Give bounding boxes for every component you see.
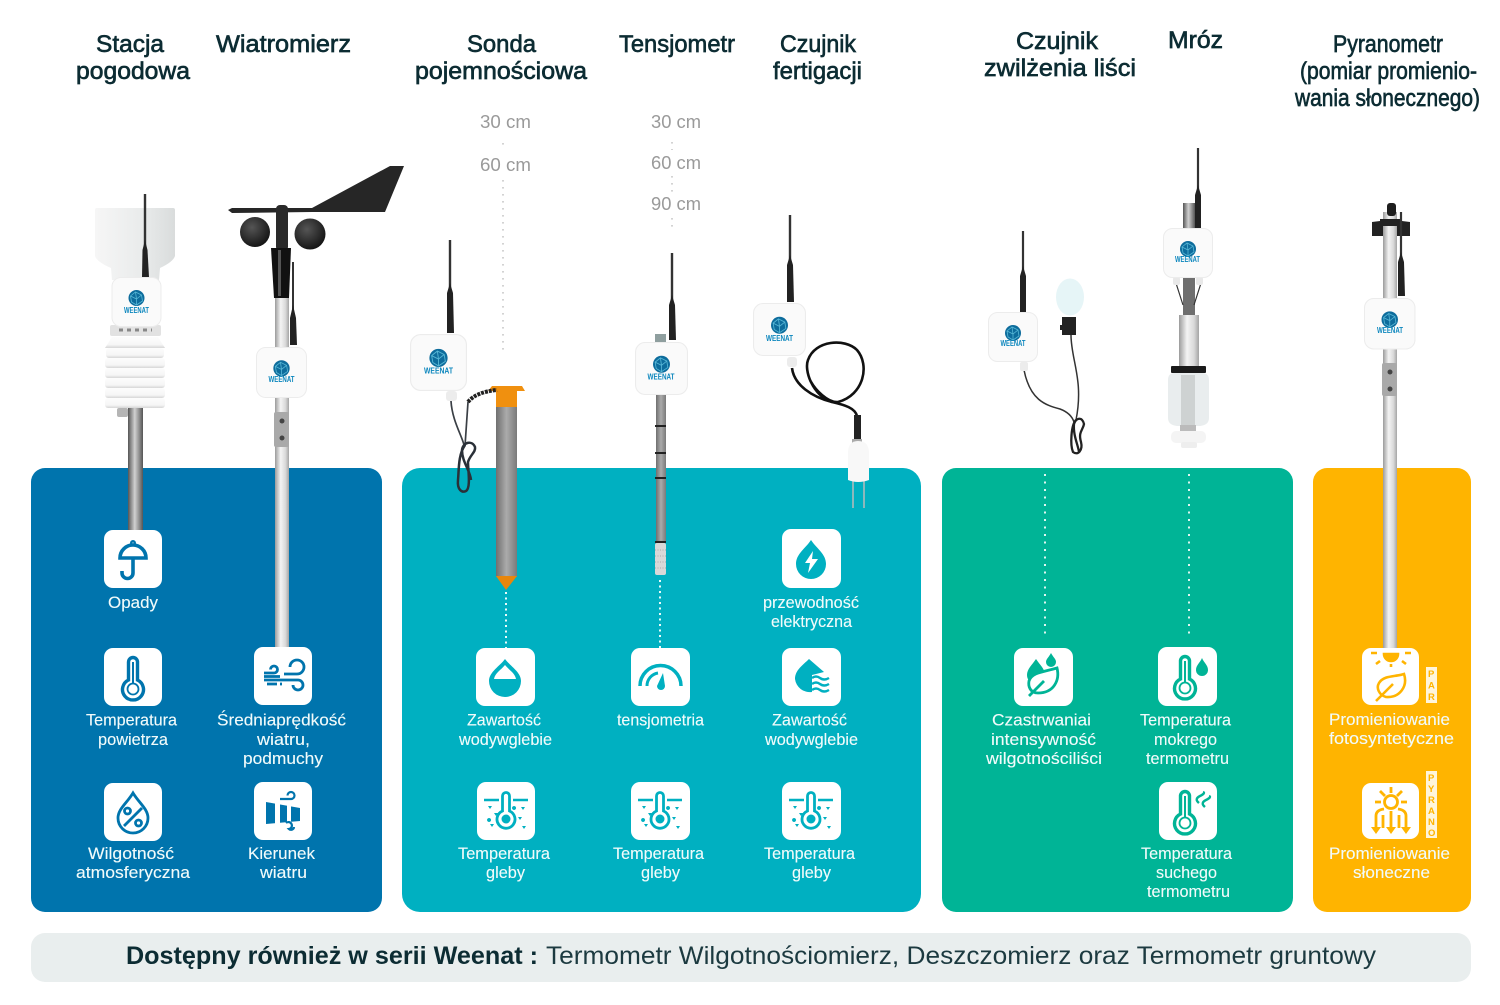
footer banner: Termometr Wilgotnościomierz, Deszczomierz oraz Termometr gruntowy bbox=[546, 942, 1377, 970]
tag: PYRANO bbox=[1426, 771, 1437, 839]
device: pyranometr bbox=[1365, 203, 1415, 649]
tag: PYRANO: R bbox=[1428, 795, 1435, 806]
icon: thermometer bbox=[122, 658, 144, 700]
metric: Temperatura mokrego termometru bbox=[1140, 647, 1232, 768]
title: Sonda pojemnościowa: pojemnościowa bbox=[415, 58, 588, 85]
device: tensjometr: WEENAT bbox=[648, 372, 675, 382]
metric: Wilgotność atmosferyczna: atmosferyczna bbox=[76, 863, 191, 882]
icon: half drop bbox=[489, 659, 521, 697]
metric: Temperatura gleby (sonda) bbox=[458, 782, 551, 882]
icon: gauge bbox=[640, 666, 681, 690]
metric: Temperatura suchego termometru bbox=[1141, 782, 1233, 901]
metric: Zawartość wody w glebie (sonda): Zawartość bbox=[467, 710, 541, 730]
metric: Promieniowanie fotosyntetyczne bbox=[1329, 648, 1454, 748]
dotted link: mróz bbox=[1188, 474, 1190, 638]
metric: Opady bbox=[104, 530, 162, 612]
panel: gleba bbox=[402, 468, 921, 912]
metric: Temperatura powietrza: powietrza bbox=[98, 730, 169, 749]
title: Czujnik fertigacji: Czujnik bbox=[780, 31, 857, 58]
metric: Zawartość wody w glebie (fertigacja): wodywglebie bbox=[764, 730, 858, 749]
metric: Zawartość wody w glebie (sonda) bbox=[458, 648, 552, 749]
footer banner bbox=[31, 933, 1471, 982]
metric: Promieniowanie słoneczne: Promieniowanie bbox=[1329, 844, 1450, 863]
device: mróz bbox=[1164, 148, 1212, 448]
metric: Zawartość wody w glebie (sonda): wodywglebie bbox=[458, 730, 552, 749]
metric: Kierunek wiatru: wiatru bbox=[259, 863, 307, 882]
metric: Czas trwania i intensywność wilgotności liści: Czastrwaniai bbox=[992, 710, 1091, 730]
device: stacja pogodowa: WEENAT bbox=[124, 305, 150, 315]
title: Pyranometr: Pyranometr bbox=[1333, 31, 1443, 58]
tag: PYRANO: O bbox=[1428, 828, 1435, 839]
metric: Kierunek wiatru bbox=[248, 782, 315, 882]
device: stacja pogodowa bbox=[95, 194, 175, 531]
metric: przewodność elektryczna bbox=[763, 529, 859, 631]
title: Stacja pogodowa bbox=[76, 31, 191, 85]
metric: Kierunek wiatru: Kierunek bbox=[248, 844, 315, 863]
icon: wind bbox=[264, 660, 304, 690]
tag: PAR: A bbox=[1428, 680, 1435, 692]
title: Pyranometr: (pomiar promienio- bbox=[1300, 58, 1477, 85]
metric: Czas trwania i intensywność wilgotności liści bbox=[985, 648, 1102, 768]
device: czujnik zwilżenia liści bbox=[988, 231, 1084, 453]
metric: Promieniowanie słoneczne bbox=[1329, 783, 1450, 882]
icon: sun with arrows bbox=[1371, 787, 1411, 834]
title: Czujnik fertigacji: fertigacji bbox=[773, 58, 862, 85]
icon: thermometer with drop bbox=[1174, 656, 1208, 699]
title: Stacja pogodowa: Stacja bbox=[96, 31, 165, 58]
icon: sun over leaf bbox=[1371, 653, 1411, 701]
title: Mróz: Mróz bbox=[1168, 27, 1223, 54]
title: Czujnik zwilżenia liści bbox=[984, 28, 1136, 82]
dotted link: sonda bbox=[505, 592, 507, 648]
depth scale: Sonda pojemnościowa: 30 cm bbox=[480, 112, 531, 132]
tag: PYRANO: A bbox=[1428, 806, 1435, 817]
metric: Średnia prędkość wiatru bbox=[217, 647, 347, 768]
metric: Temperatura gleby (sonda): gleby bbox=[486, 863, 525, 882]
device: czujnik fertigacji bbox=[754, 215, 869, 508]
metric: tensjometria bbox=[617, 648, 704, 730]
icon: soil thermometer bbox=[484, 792, 528, 829]
metric: Temperatura gleby (sonda): Temperatura bbox=[458, 844, 551, 863]
footer banner: Dostępny również w serii Weenat : bbox=[126, 942, 538, 970]
metric: Zawartość wody w glebie (fertigacja) bbox=[764, 648, 858, 749]
title: Czujnik fertigacji bbox=[773, 31, 862, 85]
title: Wiatromierz: Wiatromierz bbox=[216, 31, 351, 58]
metric: Temperatura mokrego termometru: Temperatura bbox=[1140, 710, 1232, 730]
tag: PAR bbox=[1426, 667, 1437, 703]
device: tensjometr bbox=[636, 253, 687, 575]
metric: Czas trwania i intensywność wilgotności liści: wilgotnościliści bbox=[985, 749, 1102, 768]
metric: Temperatura gleby (fertigacja) bbox=[764, 782, 856, 882]
device: wiatromierz bbox=[228, 166, 404, 648]
depth scale: Tensjometr: 90 cm bbox=[651, 194, 701, 214]
panel: promieniowanie bbox=[1313, 468, 1471, 912]
icon: soil thermometer bbox=[638, 792, 682, 829]
panel: liście i mróz bbox=[942, 468, 1293, 912]
depth scale: Sonda pojemnościowa bbox=[480, 112, 531, 352]
metric: przewodność elektryczna: elektryczna bbox=[771, 612, 853, 631]
tag: PAR: P bbox=[1428, 669, 1435, 680]
device: wiatromierz: WEENAT bbox=[268, 374, 295, 384]
depth scale: Tensjometr: 60 cm bbox=[651, 153, 701, 173]
metric: Temperatura suchego termometru: suchego bbox=[1156, 863, 1217, 882]
metric: Czas trwania i intensywność wilgotności liści: intensywność bbox=[991, 730, 1097, 749]
metric: Opady: Opady bbox=[108, 593, 158, 612]
metric: Temperatura powietrza bbox=[86, 648, 178, 749]
title: Czujnik zwilżenia liści: Czujnik bbox=[1016, 28, 1099, 55]
metric: Temperatura mokrego termometru: mokrego bbox=[1154, 730, 1217, 749]
metric: Temperatura suchego termometru: Temperatura bbox=[1141, 844, 1233, 863]
device: mróz: WEENAT bbox=[1175, 254, 1201, 264]
metric: Temperatura gleby (tensjometr): gleby bbox=[641, 863, 680, 882]
device: sonda pojemnościowa bbox=[411, 240, 525, 590]
icon: bolt drop bbox=[796, 540, 826, 579]
metric: Promieniowanie słoneczne: słoneczne bbox=[1353, 863, 1430, 882]
metric: Temperatura gleby (fertigacja): Temperatura bbox=[764, 844, 856, 863]
title: Tensjometr: Tensjometr bbox=[619, 31, 735, 58]
metric: tensjometria: tensjometria bbox=[617, 710, 704, 730]
icon: thermometer with vapour bbox=[1174, 792, 1210, 834]
dotted link: tensjometr bbox=[659, 580, 661, 648]
device: czujnik zwilżenia liści: WEENAT bbox=[1000, 338, 1026, 348]
tag: PYRANO: P bbox=[1428, 773, 1435, 784]
metric: Wilgotność atmosferyczna: Wilgotność bbox=[88, 844, 175, 863]
panel: pogoda bbox=[31, 468, 382, 912]
metric: Promieniowanie fotosyntetyczne: fotosyntetyczne bbox=[1329, 729, 1454, 748]
metric: Temperatura suchego termometru: termometru bbox=[1147, 882, 1230, 901]
title: Sonda pojemnościowa bbox=[415, 31, 588, 85]
device: pyranometr: WEENAT bbox=[1377, 325, 1404, 335]
metric: przewodność elektryczna: przewodność bbox=[763, 593, 859, 612]
title: Czujnik zwilżenia liści: zwilżenia liści bbox=[984, 55, 1136, 82]
metric: Wilgotność atmosferyczna bbox=[76, 783, 191, 882]
icon: drop with waves bbox=[795, 659, 829, 692]
depth scale: Tensjometr: 30 cm bbox=[651, 112, 701, 132]
device: sonda pojemnościowa: WEENAT bbox=[424, 366, 454, 376]
metric: Zawartość wody w glebie (fertigacja): Zawartość bbox=[772, 710, 847, 730]
metric: Średnia prędkość wiatru: podmuchy bbox=[243, 749, 324, 768]
tag: PYRANO: N bbox=[1428, 817, 1435, 828]
depth scale: Sonda pojemnościowa: 60 cm bbox=[480, 155, 531, 175]
tag: PAR: R bbox=[1428, 692, 1435, 703]
tag: PYRANO: Y bbox=[1428, 784, 1435, 795]
metric: Temperatura gleby (fertigacja): gleby bbox=[792, 863, 831, 882]
metric: Średnia prędkość wiatru: wiatru, bbox=[256, 730, 310, 749]
metric: Temperatura powietrza: Temperatura bbox=[86, 710, 178, 730]
title: Pyranometr bbox=[1294, 31, 1480, 112]
metric: Temperatura gleby (tensjometr) bbox=[613, 782, 705, 882]
icon: humidity drop bbox=[118, 793, 148, 833]
dotted link: czujnik zwilżenia bbox=[1044, 474, 1046, 638]
device: czujnik fertigacji: WEENAT bbox=[766, 333, 794, 343]
icon: windsock bbox=[266, 792, 300, 830]
icon: umbrella bbox=[120, 542, 146, 578]
metric: Temperatura mokrego termometru: termometru bbox=[1146, 749, 1229, 768]
metric: Średnia prędkość wiatru: Średniaprędkość bbox=[217, 710, 347, 730]
depth scale: Tensjometr bbox=[651, 112, 701, 232]
icon: leaf with drops bbox=[1027, 653, 1058, 696]
title: Sonda pojemnościowa: Sonda bbox=[467, 31, 537, 58]
metric: Promieniowanie fotosyntetyczne: Promieniowanie bbox=[1329, 710, 1450, 729]
title: Stacja pogodowa: pogodowa bbox=[76, 58, 191, 85]
icon: soil thermometer bbox=[789, 792, 833, 829]
metric: Temperatura gleby (tensjometr): Temperatura bbox=[613, 844, 705, 863]
